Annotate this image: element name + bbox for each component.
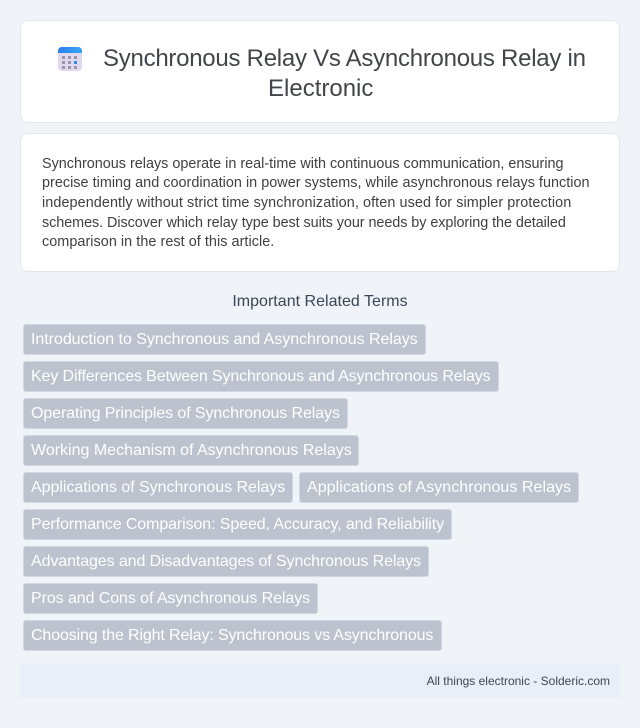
panel: introduction: [20, 133, 620, 272]
tag: introduction: Introduction to Synchronous and Asynchronous Relays: [31, 331, 418, 348]
tag: operating principles: [23, 398, 348, 429]
tag: choosing the right relay: [23, 620, 442, 651]
panel: related terms tags: [23, 324, 579, 651]
tag: pros and cons: [23, 583, 318, 614]
title: [103, 45, 586, 102]
heading: important related terms: Important Related Terms: [232, 293, 408, 310]
footer: [20, 664, 620, 698]
footer: All things electronic - Solderic.com: [427, 674, 610, 688]
tag: applications asynchronous: [299, 472, 579, 503]
title: Electronic: [268, 75, 373, 102]
text: introduction paragraph: precise timing and coordination in power systems, while asynchronous relays function: [42, 175, 590, 191]
text: introduction paragraph: Synchronous relays operate in real-time with continuous communication, ensuring: [42, 156, 564, 172]
tag: key differences: Key Differences Between Synchronous and Asynchronous Relays: [31, 368, 491, 385]
tag: key differences: [23, 361, 499, 392]
tag: performance comparison: Performance Comparison: Speed, Accuracy, and Reliability: [31, 516, 444, 533]
tag: working mechanism: [23, 435, 359, 466]
text: introduction paragraph: independently without strict time synchronization, often used for simpler protection: [42, 195, 571, 211]
tag: applications asynchronous: Applications of Asynchronous Relays: [307, 479, 571, 496]
tag: performance comparison: [23, 509, 452, 540]
text: introduction paragraph: [42, 156, 590, 250]
tag: working mechanism: Working Mechanism of Asynchronous Relays: [31, 442, 352, 459]
tag: choosing the right relay: Choosing the Right Relay: Synchronous vs Asynchronous: [31, 627, 433, 644]
tag: applications synchronous: [23, 472, 293, 503]
tag: advantages and disadvantages: Advantages and Disadvantages of Synchronous Relays: [31, 553, 421, 570]
tag: operating principles: Operating Principles of Synchronous Relays: [31, 405, 340, 422]
icon: calendar: [58, 47, 82, 71]
tag: applications synchronous: Applications of Synchronous Relays: [31, 479, 285, 496]
text: introduction paragraph: schemes. Discover which relay type best suits your needs by exploring the detailed: [42, 215, 566, 231]
panel: title card: [20, 20, 620, 123]
tag: pros and cons: Pros and Cons of Asynchronous Relays: [31, 590, 310, 607]
title: Synchronous Relay Vs Asynchronous Relay in: [103, 45, 586, 72]
tag: introduction: [23, 324, 426, 355]
tag: advantages and disadvantages: [23, 546, 429, 577]
text: introduction paragraph: comparison in the rest of this article.: [42, 234, 274, 250]
